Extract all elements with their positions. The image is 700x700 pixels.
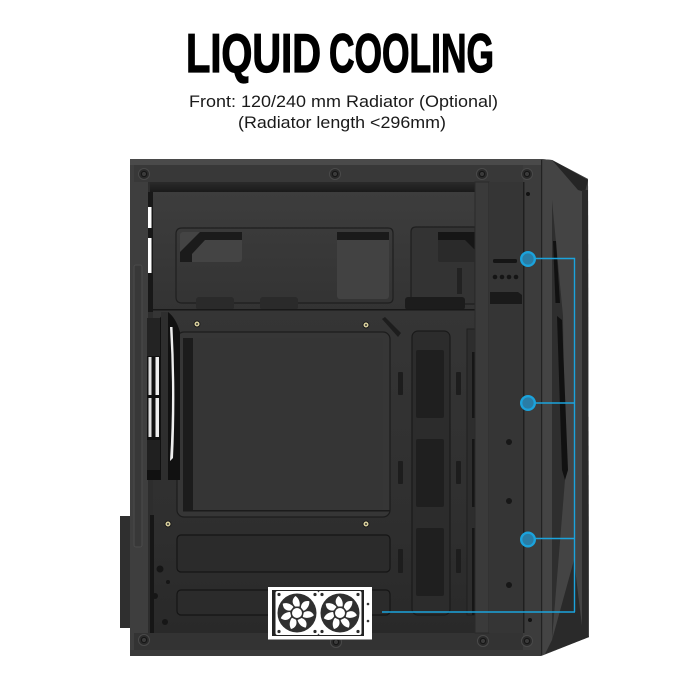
title: LIQUID: [186, 22, 321, 84]
title: COOLING: [329, 22, 494, 84]
upper cutout frame: [176, 228, 393, 303]
rear fan: [147, 312, 180, 480]
cable panel: [412, 331, 450, 615]
main panel frame: [177, 332, 390, 517]
rear strip: [130, 159, 148, 656]
icon: 240 mm radiator: [268, 587, 372, 640]
bottom bar: [130, 633, 541, 656]
cutout left: [180, 232, 242, 262]
small slots: [382, 317, 461, 573]
bottom left holes: [150, 515, 170, 633]
standoffs: [165, 321, 369, 527]
callout markers: [521, 252, 535, 546]
drive panel: [489, 182, 523, 633]
lower slot: [177, 535, 390, 572]
front panel: [541, 159, 589, 656]
subtitle: (Radiator length <296mm): [238, 113, 446, 132]
upper plate: [153, 192, 475, 310]
front rail: [523, 165, 541, 650]
rear bracket: [120, 516, 131, 628]
lower plate: [153, 310, 475, 650]
rear opening gap: [148, 192, 153, 312]
cutout middle: [337, 232, 389, 299]
case body: [130, 159, 589, 656]
callout lines: [382, 258, 575, 612]
tabs: [196, 297, 465, 310]
cutout right: [411, 227, 475, 304]
top bar: [130, 159, 541, 192]
subtitle: [189, 92, 498, 132]
subtitle: Front: 120/240 mm Radiator (Optional): [189, 92, 498, 111]
PC case illustration: [120, 159, 589, 656]
screws: [138, 168, 532, 648]
vertical pillar: [475, 182, 489, 633]
lower slot 2: [177, 590, 390, 615]
title: [186, 22, 494, 84]
side strip: [467, 329, 475, 615]
